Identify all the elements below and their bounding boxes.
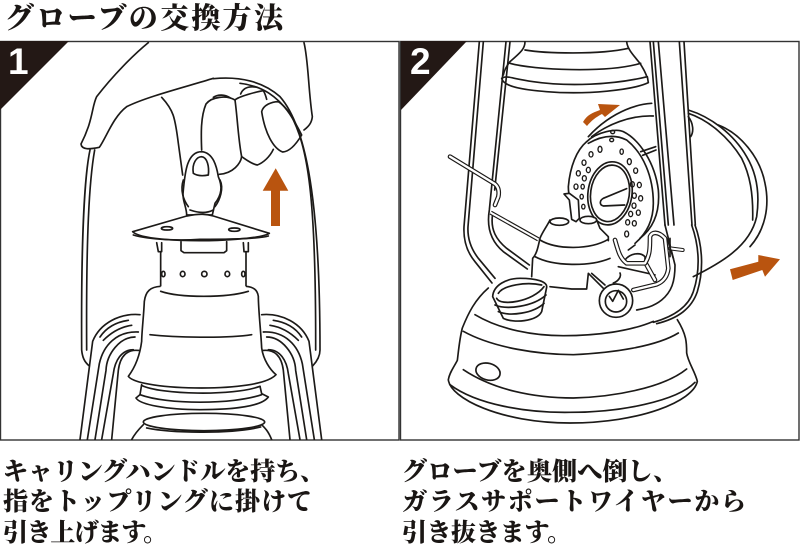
title: グローブの交換方法 — [5, 1, 287, 35]
glass globe top — [132, 413, 272, 440]
top ring disc with holes — [568, 130, 659, 247]
carrying handle — [82, 78, 320, 366]
chimney with vent holes — [161, 252, 246, 292]
panel: step 1 — [0, 41, 399, 440]
lantern hood — [128, 286, 276, 410]
step 2 caption: ガラスサポートワイヤーから — [402, 488, 746, 516]
tilted glass globe — [588, 103, 767, 277]
hand — [81, 43, 312, 175]
step 1 caption: キャリングハンドルを持ち、 — [3, 457, 325, 486]
illustration: hand lifting the top ring of the lantern — [80, 43, 322, 440]
corner badge 1: 1 — [8, 41, 29, 82]
fuel tank base — [448, 288, 697, 423]
lighting lever wire — [450, 157, 538, 239]
step 1 caption: 指をトップリングに掛けて — [3, 487, 312, 516]
ventilator cap — [133, 214, 269, 253]
illustration: tilted globe and lantern base — [448, 42, 767, 423]
panel: step 2 — [400, 41, 799, 440]
step 1 caption — [3, 457, 325, 546]
arrow: pull out — [730, 255, 780, 280]
corner badge 2: 2 — [410, 41, 431, 82]
lantern frame wires — [464, 42, 695, 283]
arrow: tilt globe back — [583, 104, 620, 126]
top ring knob — [182, 152, 222, 215]
frame arm right — [260, 314, 322, 440]
burner and wick — [532, 193, 615, 289]
step 2 caption — [402, 458, 746, 546]
frame arm left — [80, 314, 142, 440]
corner badge 1 — [0, 41, 69, 110]
top cap hood — [502, 42, 648, 93]
wire ring — [599, 273, 633, 317]
step 2 caption: グローブを奥側へ倒し、 — [402, 458, 678, 486]
arrow: lift up — [263, 168, 288, 226]
frame foot and glass support wire — [615, 225, 702, 324]
corner badge 2 — [401, 41, 467, 110]
filler cap — [493, 278, 547, 321]
